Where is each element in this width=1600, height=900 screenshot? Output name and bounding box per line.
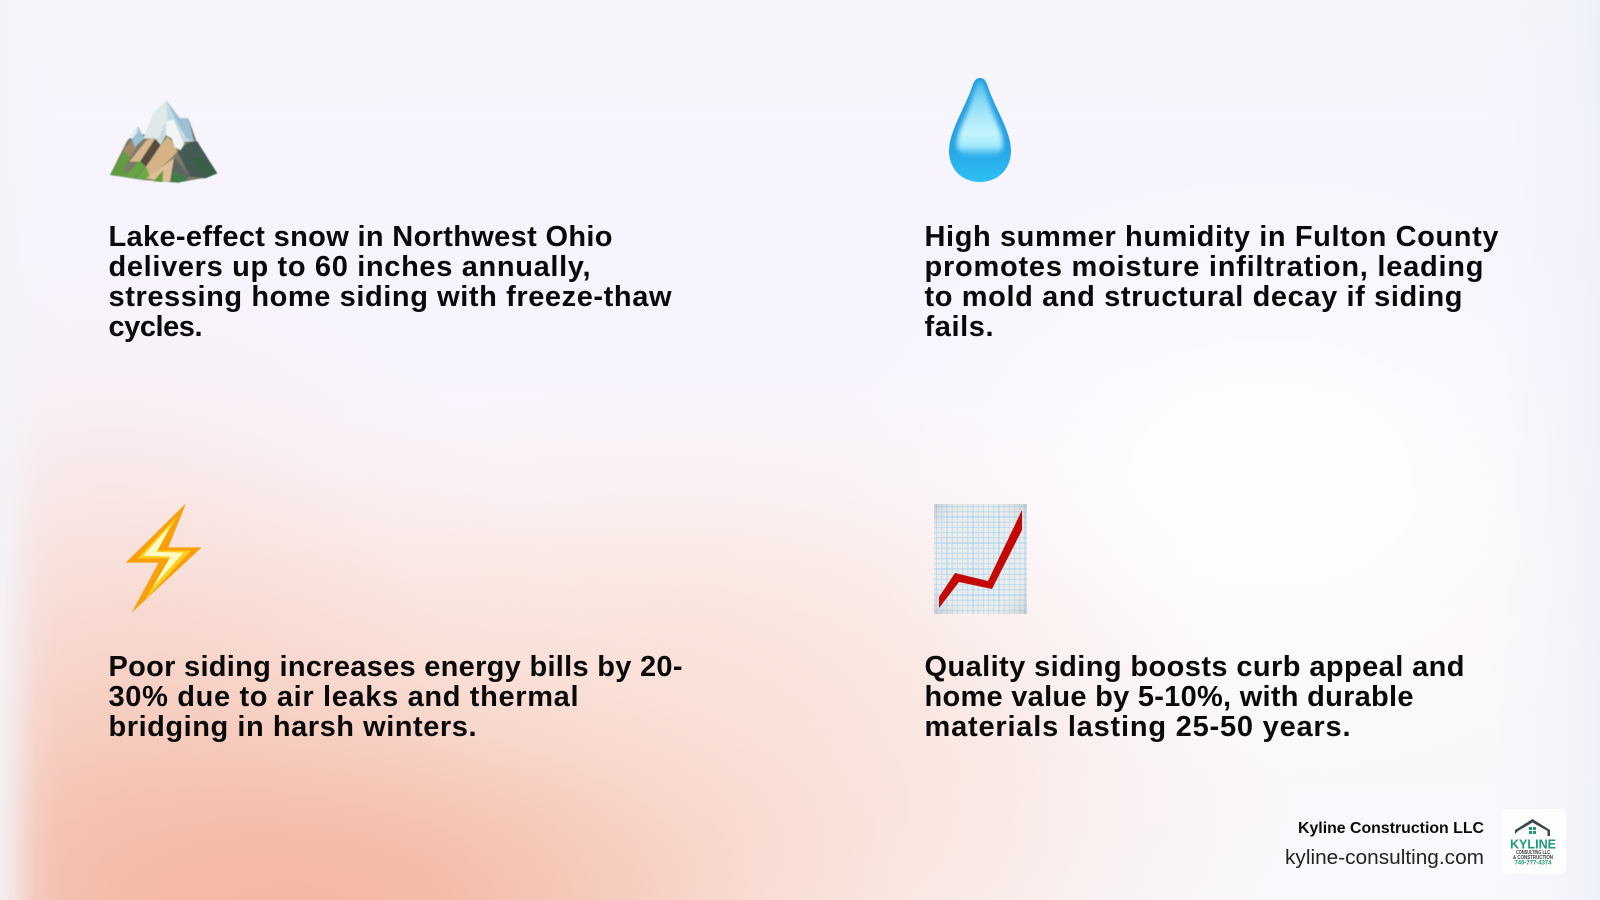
text: value: materials lasting 25-50 years. xyxy=(924,711,1350,743)
text: energy xyxy=(108,651,682,743)
icon: lightning bolt xyxy=(126,503,202,613)
text: value: Quality siding boosts curb appeal and xyxy=(924,651,1464,683)
text: snow xyxy=(108,221,672,343)
text: energy: Poor siding increases energy bills by 20- xyxy=(108,651,682,683)
text: energy: 30% due to air leaks and thermal xyxy=(108,681,578,713)
panel: summer humidity xyxy=(924,78,1498,343)
logo: CONSULTING LLC xyxy=(1516,850,1550,856)
panel: home value xyxy=(924,504,1464,743)
logo xyxy=(1501,809,1566,874)
company name: Kyline Construction LLC xyxy=(1298,820,1484,837)
text: snow: delivers up to 60 inches annually, xyxy=(108,251,590,283)
panel: lake-effect snow xyxy=(108,101,672,343)
text: humidity xyxy=(924,221,1498,343)
text: humidity: fails. xyxy=(924,311,994,343)
logo: & CONSTRUCTION xyxy=(1513,855,1553,861)
text: energy: bridging in harsh winters. xyxy=(108,711,476,743)
text: snow: Lake-effect snow in Northwest Ohio xyxy=(108,221,612,253)
footer: company brand xyxy=(1285,809,1566,874)
text: humidity: High summer humidity in Fulton County xyxy=(924,221,1498,253)
icon: snow-capped mountain xyxy=(110,101,217,183)
text: humidity: promotes moisture infiltration, leading xyxy=(924,251,1484,283)
icon: water drop xyxy=(949,78,1011,182)
text: value xyxy=(924,651,1464,743)
text: value: home value by 5-10%, with durable xyxy=(924,681,1414,713)
icon: rising chart xyxy=(934,504,1027,614)
logo: 740-777-4374 xyxy=(1514,860,1552,866)
text: snow: stressing home siding with freeze-thaw xyxy=(108,281,672,313)
text: humidity: to mold and structural decay if siding xyxy=(924,281,1462,313)
logo: KYLINE xyxy=(1510,836,1556,852)
panel: energy bills xyxy=(108,503,682,743)
website: kyline-consulting.com xyxy=(1285,847,1484,869)
text: snow: cycles. xyxy=(108,311,202,343)
